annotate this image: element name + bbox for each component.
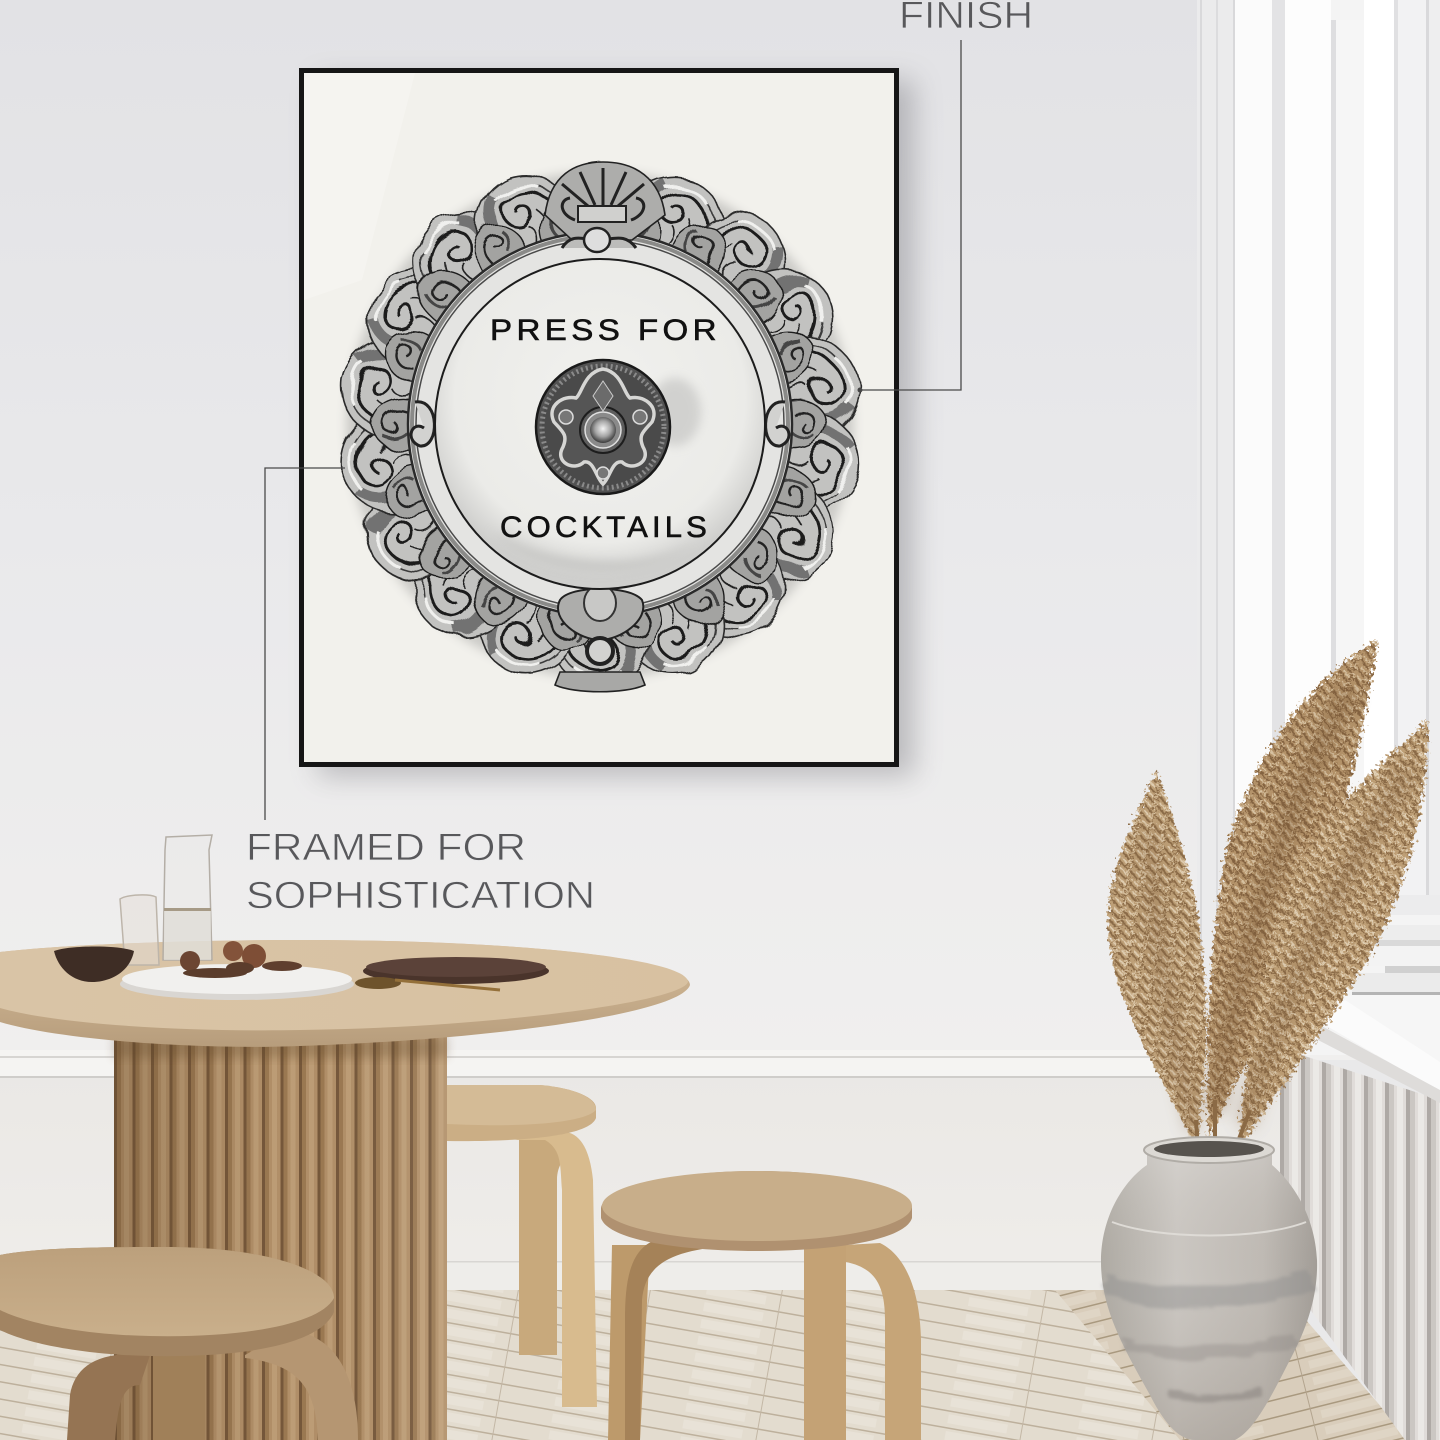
front right stool <box>601 1171 921 1440</box>
centre plume <box>1207 640 1378 1140</box>
callout label: framed for sophistication <box>246 827 595 917</box>
lower wall panel <box>0 1060 1300 1300</box>
ornate scroll lobes <box>333 162 867 688</box>
side scroll left <box>411 402 434 446</box>
callout label: framed for sophistication: SOPHISTICATION <box>246 875 595 917</box>
drinking glass <box>120 895 159 965</box>
poster frame <box>299 68 899 767</box>
table top <box>0 940 690 1047</box>
poster drop shadow <box>318 80 914 776</box>
dish lower shading <box>490 530 700 571</box>
wooden plate <box>363 957 549 984</box>
vase weathering <box>1106 1280 1312 1399</box>
stems <box>1196 1100 1250 1152</box>
front left stool <box>0 1247 358 1440</box>
bottom cartouche <box>555 585 645 692</box>
doorbell button <box>536 360 670 494</box>
ceramic vase <box>1101 1137 1317 1440</box>
marble plate <box>120 964 354 1000</box>
back stool <box>447 1085 597 1407</box>
dark bowl <box>54 946 134 982</box>
text: press for: PRESS FOR <box>490 314 721 347</box>
carafe <box>163 835 212 960</box>
radiator <box>1280 1048 1440 1440</box>
baseboard <box>0 1261 1110 1290</box>
text: cocktails: COCKTAILS <box>500 511 711 544</box>
pampas grass plumes <box>1108 640 1428 1152</box>
vase shading <box>1101 1150 1317 1440</box>
inner dish <box>435 259 765 589</box>
wall <box>0 0 1440 1060</box>
window sill <box>1318 995 1440 1103</box>
dish shadow <box>649 378 701 446</box>
callout label: framed for sophistication: FRAMED FOR <box>246 827 526 869</box>
table pedestal <box>114 1030 447 1440</box>
callout line: framed <box>265 468 345 820</box>
left plume <box>1108 770 1206 1150</box>
ornamental frame <box>333 162 867 692</box>
plain inner ring band <box>408 232 792 616</box>
herringbone floor <box>0 1290 1410 1440</box>
chair rail moulding <box>0 1050 1180 1078</box>
glass reflection <box>304 73 415 300</box>
chocolate truffles <box>180 941 302 978</box>
right plume <box>1238 720 1428 1150</box>
spoon and fork <box>355 977 500 990</box>
callout line: finish <box>858 40 961 392</box>
stack of books on sill <box>1350 925 1440 995</box>
side scroll right <box>766 402 789 446</box>
window frame and casing <box>1197 0 1440 1055</box>
top cartouche <box>545 162 665 252</box>
poster paper <box>304 73 894 762</box>
